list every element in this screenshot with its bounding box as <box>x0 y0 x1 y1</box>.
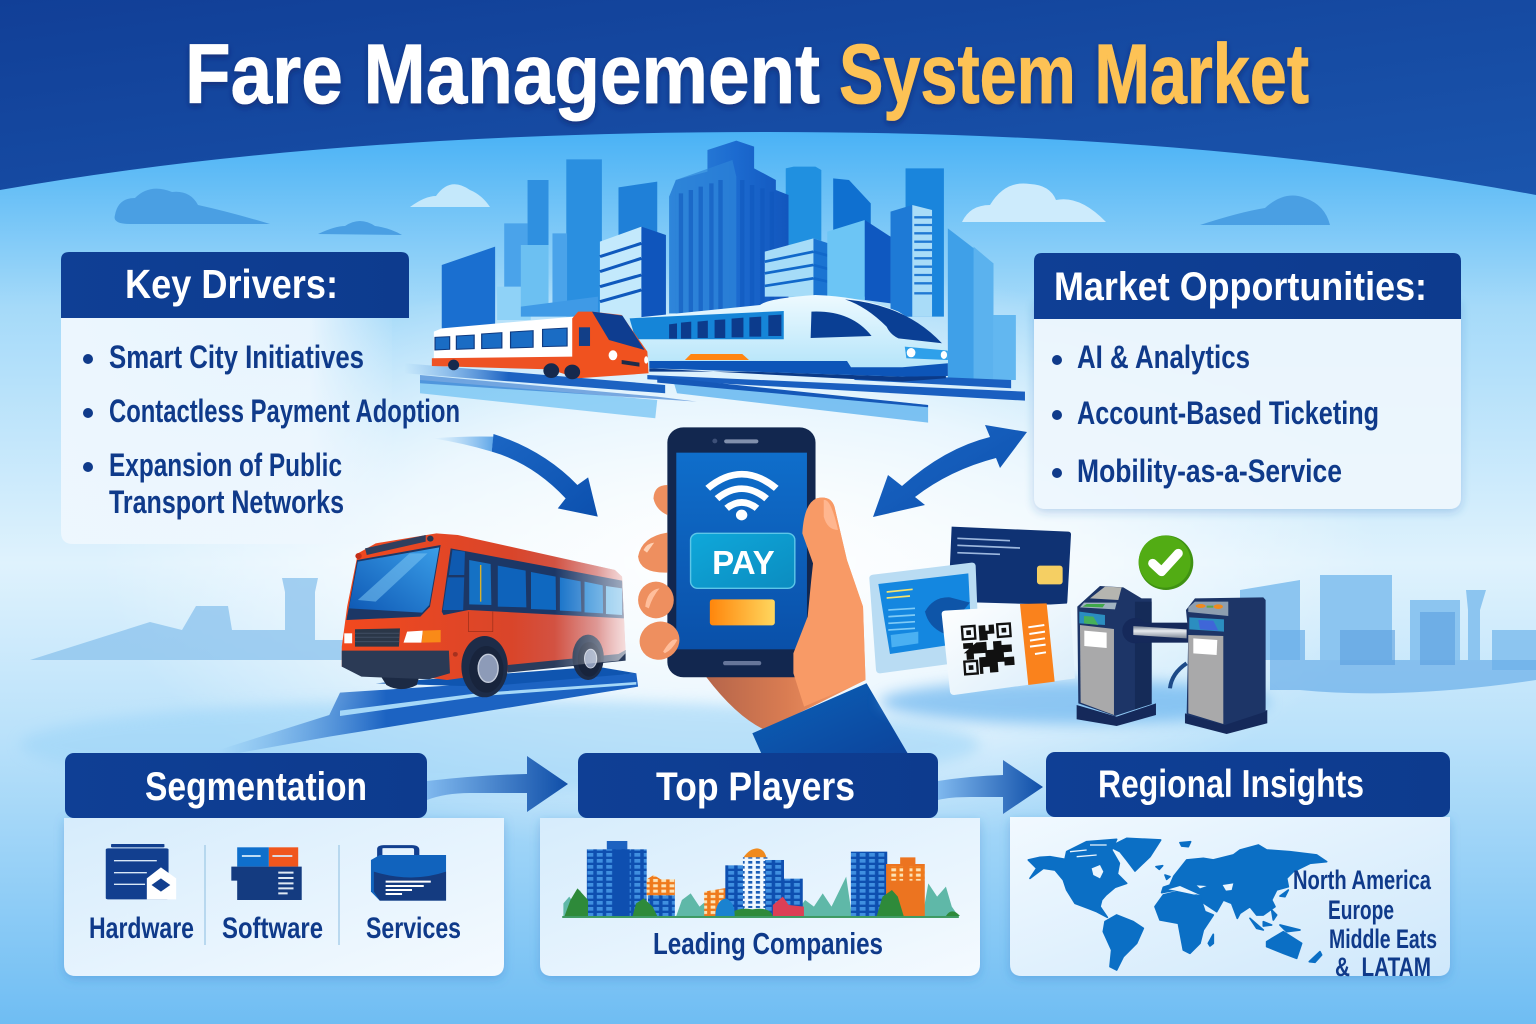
key drivers heading <box>61 252 409 318</box>
region list: North America <box>1293 865 1432 895</box>
market opportunities heading <box>1034 253 1461 319</box>
label: leading companies: Leading Companies <box>653 926 883 961</box>
title: System Market <box>839 27 1309 121</box>
pay button: PAY <box>712 545 775 582</box>
top players heading <box>578 753 938 818</box>
region list: Middle Eats <box>1329 924 1437 954</box>
panel: key drivers <box>61 252 460 544</box>
travel pass <box>869 563 979 673</box>
market opportunities list: Mobility-as-a-Service <box>1077 453 1342 489</box>
icon: fare gates <box>1077 586 1267 734</box>
segmentation heading <box>65 753 427 818</box>
dividers <box>205 845 339 945</box>
label: software: Software <box>222 912 323 945</box>
key drivers list: Expansion of Public <box>109 447 342 483</box>
panel: market opportunities <box>1034 253 1461 509</box>
smart card <box>948 527 1071 605</box>
road under bus <box>219 667 638 757</box>
gate barrier <box>1122 618 1190 643</box>
fingers <box>632 485 838 667</box>
market opportunities list <box>1052 339 1379 489</box>
icon: green check <box>1139 535 1193 590</box>
key drivers list: Smart City Initiatives <box>109 339 364 375</box>
rail tracks <box>404 363 1025 423</box>
arrow: drivers to phone <box>433 434 598 517</box>
icon: tickets and cards <box>869 527 1075 695</box>
title <box>185 27 1309 121</box>
ground shadow <box>880 680 1270 724</box>
icon: hand holding phone <box>632 427 908 753</box>
icon: city of companies <box>562 841 960 918</box>
market opportunities body <box>1034 300 1461 509</box>
region list: & LATAM <box>1335 952 1431 982</box>
city skyline <box>442 141 1016 380</box>
market opportunities list: AI & Analytics <box>1077 339 1250 375</box>
icon: hardware <box>106 844 176 899</box>
region list <box>1293 865 1437 982</box>
wifi icon <box>708 474 776 518</box>
distant skyline right <box>1240 575 1536 693</box>
arrow: segmentation to top players <box>427 756 568 812</box>
qr code <box>962 623 1015 675</box>
regional insights body <box>1010 817 1450 976</box>
qr ticket <box>942 603 1075 695</box>
segmentation body <box>64 818 504 976</box>
thumb <box>793 498 866 707</box>
top players heading: Top Players <box>656 765 855 809</box>
panel: top players <box>540 753 980 976</box>
orange bar <box>710 599 775 625</box>
key drivers list: Contactless Payment Adoption <box>109 393 460 429</box>
panel: segmentation <box>64 753 504 976</box>
top players body <box>540 818 980 976</box>
panel: regional insights <box>1010 752 1450 982</box>
key drivers list <box>83 339 460 520</box>
header band <box>0 0 1536 195</box>
phone <box>667 427 816 677</box>
market opportunities heading: Market Opportunities: <box>1054 265 1427 309</box>
clouds <box>115 183 1330 235</box>
pay button <box>691 533 795 588</box>
label: services: Services <box>366 912 461 945</box>
bullet train <box>630 295 948 382</box>
arrow: phone to opportunities <box>873 425 1027 517</box>
label: hardware: Hardware <box>89 912 194 945</box>
title: Fare Management <box>185 27 820 121</box>
distant skyline left <box>30 578 345 660</box>
key drivers body <box>61 300 392 544</box>
icon: software <box>231 847 302 900</box>
right gate <box>1185 597 1267 734</box>
region list: Europe <box>1328 895 1394 925</box>
icon: world map <box>1028 838 1327 970</box>
regional insights heading: Regional Insights <box>1098 763 1364 806</box>
left gate <box>1077 586 1156 726</box>
red train <box>432 312 649 379</box>
segmentation heading: Segmentation <box>145 765 367 809</box>
key drivers list: Transport Networks <box>109 484 344 520</box>
market opportunities list: Account-Based Ticketing <box>1077 395 1379 431</box>
hand palm <box>706 498 866 730</box>
icon: services <box>371 847 446 901</box>
sleeve <box>752 683 908 753</box>
key drivers heading: Key Drivers: <box>125 261 338 307</box>
arrow: top players to regional insights <box>938 760 1043 814</box>
regional insights heading <box>1046 752 1450 817</box>
icon: red bus <box>342 533 626 697</box>
